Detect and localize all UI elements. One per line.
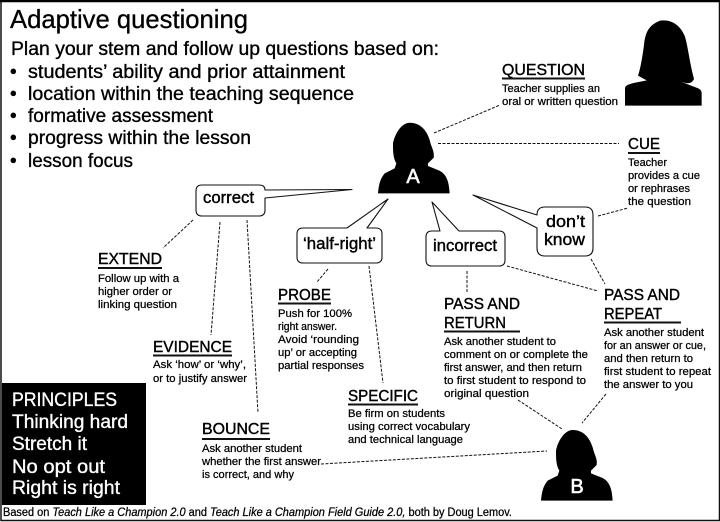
panel: principles: Thinking hard: [12, 412, 128, 433]
text block: specific: using correct vocabulary: [348, 421, 470, 433]
text block: probe: right answer.: [278, 321, 337, 333]
text block: cue: the question: [628, 196, 691, 208]
text block: planning list: •: [10, 62, 17, 83]
panel: principles: Right is right: [12, 478, 121, 499]
icon: student B silhouette: B: [570, 476, 584, 498]
dashed connector: bounce to B: [321, 451, 547, 464]
dashed connector: A to question: [434, 105, 500, 133]
text block: planning list: progress within the lesson: [28, 128, 251, 149]
speech bubble: don't know: [473, 195, 593, 256]
speech bubble: correct: correct: [203, 189, 254, 207]
text block: bounce: BOUNCE: [202, 421, 270, 438]
dashed connector: A to cue: [438, 142, 619, 144]
speech bubble: correct: [196, 185, 352, 216]
text block: planning list: Plan your stem and follow up questions based on:: [11, 39, 439, 60]
text block: evidence: Ask ‘how’ or ‘why’,: [153, 359, 246, 371]
dashed connector: half-right to specific: [369, 266, 383, 383]
text block: planning list: students’ ability and prior attainment: [28, 62, 346, 83]
icon: student B silhouette: [541, 430, 613, 501]
speech bubble: half-right: [297, 199, 388, 263]
text block: planning list: lesson focus: [28, 151, 133, 172]
icon: student A silhouette: A: [406, 166, 420, 188]
icon: student A silhouette: [378, 123, 450, 193]
text block: evidence: or to justify answer: [153, 373, 247, 385]
text block: pass and repeat: first student to repeat: [604, 366, 711, 378]
text block: probe: partial responses: [278, 360, 364, 372]
text block: question: Teacher supplies an: [502, 83, 600, 95]
text block: question: [502, 62, 618, 108]
panel: principles: No opt out: [12, 457, 106, 478]
dashed connector: pass and repeat to B: [582, 394, 606, 423]
text block: pass and return: original question: [444, 388, 529, 400]
dashed connector: pass and return to B: [518, 400, 562, 429]
text block: evidence: EVIDENCE: [153, 339, 232, 356]
text block: pass and repeat: [604, 287, 711, 391]
text block: specific: [348, 388, 470, 446]
text block: bounce: Ask another student: [202, 443, 302, 455]
text block: probe: Avoid ‘rounding: [278, 334, 359, 346]
dashed connector: correct to bounce: [247, 220, 258, 413]
text block: extend: Follow up with a: [98, 273, 180, 285]
text block: question: QUESTION: [502, 62, 585, 79]
text block: cue: Teacher: [628, 157, 667, 169]
text block: planning list: [10, 39, 439, 172]
panel: principles: Stretch it: [12, 434, 88, 455]
speech bubble: incorrect: [426, 202, 505, 266]
text block: pass and return: first answer, and then return: [444, 362, 582, 374]
text block: cue: or rephrases: [628, 183, 690, 195]
dashed connector: incorrect to pass and repeat: [507, 266, 598, 291]
text block: probe: Push for 100%: [278, 308, 352, 320]
text block: pass and repeat: PASS AND: [604, 287, 680, 304]
text block: pass and repeat: for an answer or cue,: [604, 340, 706, 352]
text block: pass and repeat: the answer to you: [604, 379, 693, 391]
speech bubble: incorrect: incorrect: [433, 237, 497, 255]
text block: planning list: •: [10, 128, 17, 149]
speech bubble: half-right: ‘half-right’: [303, 235, 376, 253]
dashed connector: correct to extend: [163, 220, 193, 248]
text block: pass and repeat: and then return to: [604, 353, 693, 365]
text block: pass and return: [444, 296, 588, 400]
text block: specific: Be firm on students: [348, 408, 445, 420]
text block: extend: linking question: [98, 299, 177, 311]
text block: bounce: [201, 421, 321, 481]
text block: probe: PROBE: [278, 287, 331, 304]
text block: planning list: •: [10, 84, 17, 105]
text block: evidence: [153, 339, 247, 385]
dashed connector: incorrect to pass and return: [466, 271, 468, 292]
text block: cue: [628, 136, 700, 208]
dashed connector: don't know to pass and repeat: [591, 259, 605, 284]
dashed connector: correct to evidence: [211, 222, 220, 335]
text block: pass and return: Ask another student to: [444, 336, 556, 348]
text block: cue: provides a cue: [628, 170, 700, 182]
text block: pass and return: to first student to respond to: [444, 375, 586, 387]
panel: principles: PRINCIPLES: [12, 390, 117, 411]
text block: pass and return: RETURN: [444, 315, 506, 332]
text block: pass and repeat: REPEAT: [604, 306, 662, 323]
text block: extend: higher order or: [98, 286, 172, 298]
text block: planning list: •: [10, 106, 17, 127]
text block: specific: SPECIFIC: [348, 388, 418, 405]
text block: planning list: formative assessment: [28, 106, 214, 127]
dashed connector: don't know to cue: [598, 208, 628, 216]
text block: pass and return: comment on or complete the: [444, 349, 588, 361]
text block: planning list: location within the teaching sequence: [28, 84, 354, 105]
text block: planning list: •: [10, 151, 17, 172]
text block: extend: EXTEND: [98, 251, 162, 268]
text block: probe: up’ or accepting: [278, 347, 357, 359]
speech bubble: don't know: know: [544, 231, 585, 249]
title: Adaptive questioning: [10, 4, 248, 34]
text block: extend: [98, 251, 180, 311]
text block: bounce: whether the first answer: [201, 456, 321, 468]
icon: teacher silhouette: [625, 20, 702, 106]
text block: cue: CUE: [628, 136, 660, 153]
text block: pass and repeat: Ask another student: [604, 327, 704, 339]
text block: bounce: is correct, and why: [202, 469, 294, 481]
text block: specific: and technical language: [348, 434, 463, 446]
text block: probe: [278, 287, 364, 372]
speech bubble: don't know: don’t: [546, 213, 585, 231]
panel: principles: [2, 383, 146, 505]
footer: source note: Based on Teach Like a Champion 2.0 and Teach Like a Champion Field Guide 2.0, both by Doug Lemov.: [3, 507, 512, 519]
text block: question: oral or written question: [502, 96, 618, 108]
dashed connector: half-right to probe: [317, 269, 328, 282]
text block: pass and return: PASS AND: [444, 296, 520, 313]
